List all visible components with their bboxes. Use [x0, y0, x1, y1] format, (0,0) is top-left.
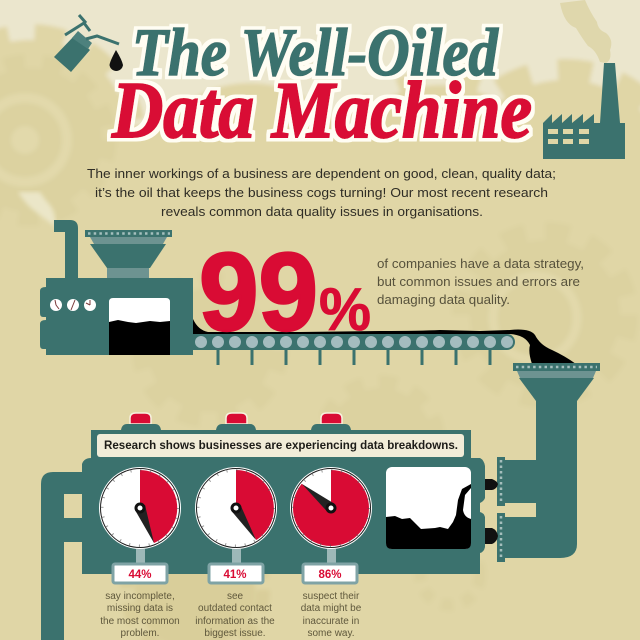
- caption: incomplete data: problem.: [121, 628, 159, 639]
- strategy text: [377, 256, 584, 307]
- caption: outdated contact: biggest issue.: [204, 628, 266, 639]
- intro text: it’s the oil that keeps the business cogs turning! Our most recent research: [95, 185, 548, 200]
- chimney: [54, 220, 78, 278]
- big number 99%: %: [319, 276, 371, 343]
- intro text: The inner workings of a business are dependent on good, clean, quality data;: [87, 166, 556, 181]
- clocks: [50, 299, 96, 311]
- gauge: 44%: [99, 467, 181, 565]
- label plate: [97, 434, 464, 457]
- gauge: 41%: [195, 467, 277, 565]
- caption: incomplete data: the most common: [100, 616, 180, 627]
- caption: inaccurate data: suspect their: [303, 591, 360, 602]
- intro text: reveals common data quality issues in organisations.: [161, 204, 483, 219]
- oil window: [386, 467, 471, 549]
- conveyor: [193, 319, 576, 365]
- hopper: [85, 230, 172, 278]
- nozzles: [485, 479, 498, 544]
- caption: inaccurate data: [301, 591, 362, 639]
- caption: inaccurate data: inaccurate in: [303, 616, 359, 627]
- caption: inaccurate data: some way.: [307, 628, 355, 639]
- caption: outdated contact: [195, 591, 275, 639]
- strategy text: but common issues and errors are: [377, 274, 580, 289]
- red buttons: [130, 413, 342, 424]
- intro text: [87, 166, 556, 219]
- gauge: 86%: [290, 467, 372, 565]
- big number 99%: 99: [199, 231, 318, 354]
- value: 41%: 41%: [223, 569, 247, 581]
- strategy text: damaging data quality.: [377, 292, 510, 307]
- left pipe: [41, 472, 90, 640]
- strategy text: of companies have a data strategy,: [377, 256, 584, 271]
- smoke from top machine: [18, 192, 55, 228]
- top machine: [40, 220, 193, 355]
- window with oil: [109, 298, 170, 355]
- flanges: [497, 457, 505, 562]
- title line 1: The Well-Oiled: [132, 14, 499, 90]
- value: 86%: [303, 564, 357, 583]
- title line 2: Data Machine: [111, 67, 532, 155]
- caption: outdated contact: information as the: [195, 616, 275, 627]
- value: 41%: [209, 564, 263, 583]
- value: 44%: [113, 564, 167, 583]
- value: 86%: 86%: [318, 569, 342, 581]
- caption: outdated contact: see: [227, 591, 243, 602]
- machine body: [82, 424, 485, 574]
- value: 44%: 44%: [128, 569, 152, 581]
- caption: incomplete data: say incomplete,: [105, 591, 175, 602]
- caption: incomplete data: [100, 591, 180, 639]
- machine body: [40, 278, 193, 355]
- label plate: Research shows businesses are experiencing data breakdowns.: [104, 438, 458, 452]
- caption: inaccurate data: data might be: [301, 603, 362, 614]
- lower machine: [82, 413, 485, 574]
- icon: factory: [543, 63, 625, 159]
- right pipe with hopper: [485, 363, 600, 562]
- caption: outdated contact: outdated contact: [198, 603, 272, 614]
- title: [111, 14, 532, 155]
- icon: factory smoke: [560, 0, 611, 63]
- caption: incomplete data: missing data is: [107, 603, 173, 614]
- icon: oil can: [54, 15, 123, 72]
